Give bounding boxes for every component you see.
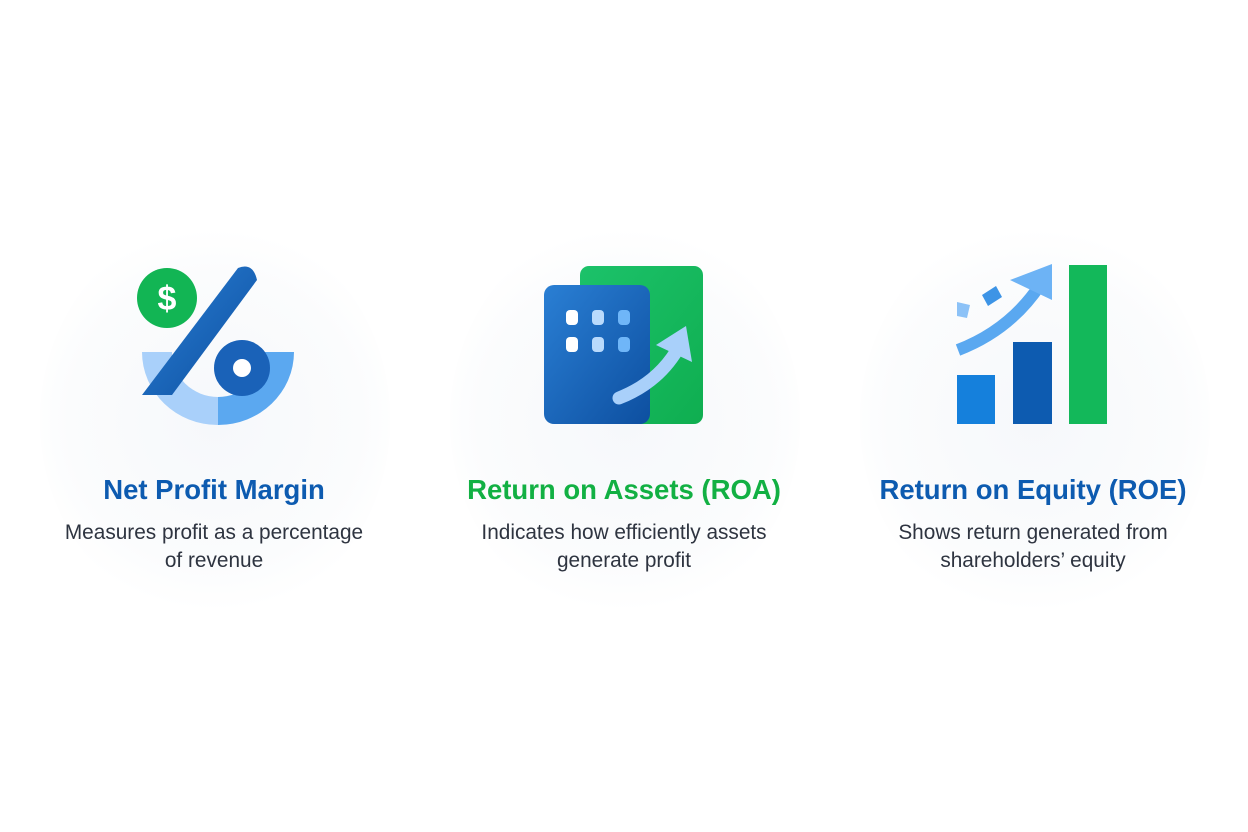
icon: percent with dollar bbox=[137, 266, 294, 425]
text bbox=[65, 521, 363, 572]
heading: Return on Assets (ROA) bbox=[467, 474, 781, 505]
heading: Return on Equity (ROE) bbox=[879, 474, 1187, 505]
icon: percent with dollar: $ bbox=[158, 280, 177, 318]
text: Shows return generated from bbox=[898, 521, 1168, 544]
card: net profit margin bbox=[65, 474, 363, 572]
icon: assets building with arrow bbox=[544, 266, 703, 424]
card: ROA bbox=[467, 474, 781, 572]
text: shareholders’ equity bbox=[940, 549, 1126, 572]
text: Measures profit as a percentage bbox=[65, 521, 363, 544]
heading: Net Profit Margin bbox=[103, 474, 325, 505]
text: generate profit bbox=[557, 549, 691, 572]
text bbox=[481, 521, 767, 572]
icon: equity bar chart bbox=[957, 264, 1107, 424]
text bbox=[898, 521, 1168, 572]
text: of revenue bbox=[165, 549, 263, 572]
card: ROE bbox=[879, 474, 1187, 572]
text: Indicates how efficiently assets bbox=[481, 521, 767, 544]
